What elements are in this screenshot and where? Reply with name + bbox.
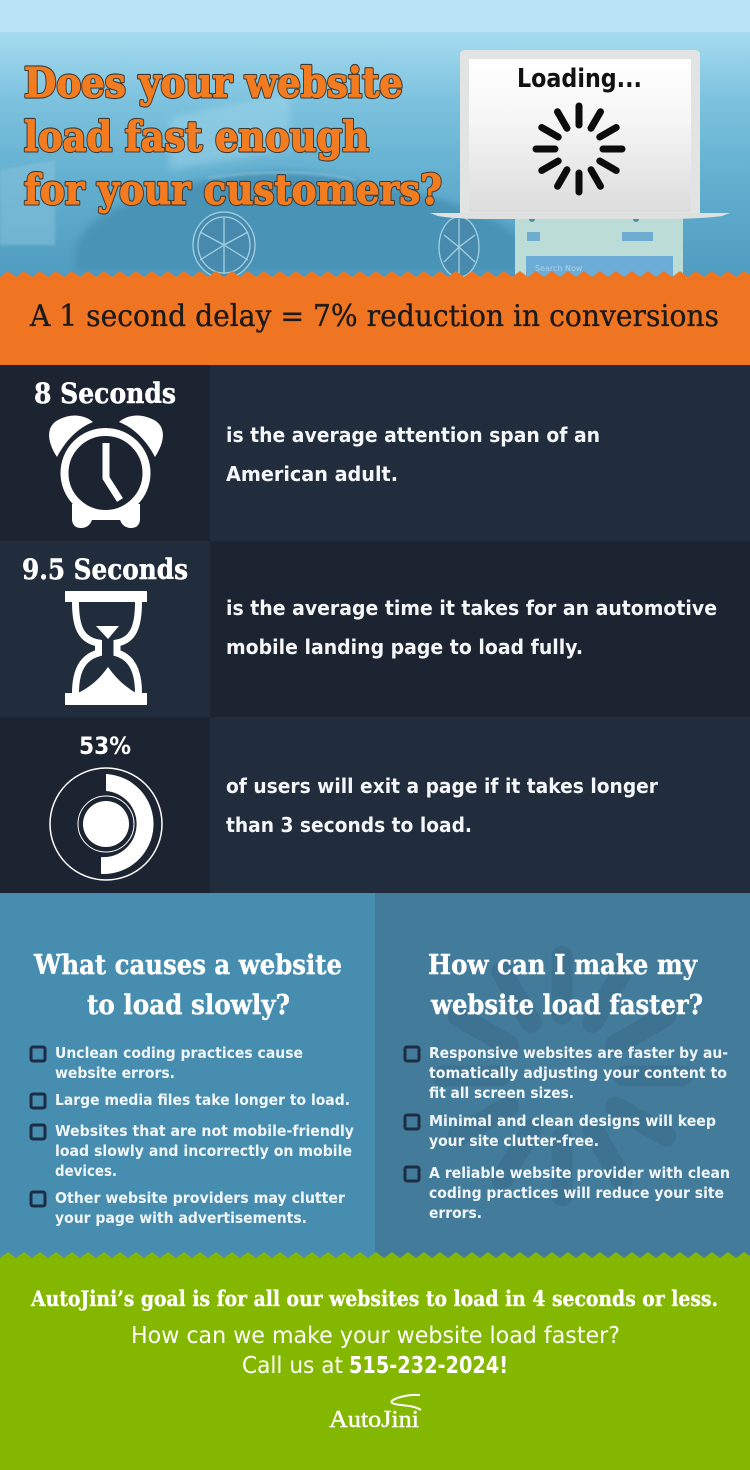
title: for your customers? [24, 166, 442, 214]
call to action: How can we make your website load faster? [131, 1323, 620, 1349]
panel: causes [0, 893, 375, 1259]
heading [428, 950, 703, 1021]
list: load slowly and incorrectly on mobile [55, 1142, 352, 1160]
web page behind laptop [515, 216, 683, 278]
stat description [226, 774, 658, 837]
list: website errors. [55, 1064, 175, 1082]
stat description: of users will exit a page if it takes longer [226, 774, 658, 798]
stat heading: 53% [79, 732, 131, 760]
list: errors. [429, 1204, 482, 1222]
banner text: A 1 second delay = 7% reduction in conversions [29, 299, 719, 334]
heading: to load slowly? [87, 990, 290, 1021]
icon: alarm clock [49, 415, 163, 528]
heading: What causes a website [33, 950, 342, 981]
list [429, 1044, 730, 1222]
title: Does your website [24, 59, 403, 107]
icon: faint spinner watermark [442, 956, 682, 1196]
stat heading: 8 Seconds [34, 377, 176, 410]
list: fit all screen sizes. [429, 1084, 574, 1102]
checkboxes [31, 1047, 45, 1206]
green footer [0, 1252, 750, 1470]
title: load fast enough [24, 113, 369, 161]
logo: AutoJini: AutoJini [329, 1407, 419, 1433]
title: for your customers? [24, 166, 442, 214]
stat description [226, 596, 717, 659]
call to action: 515-232-2024! [349, 1353, 508, 1379]
call to action: Call us at [242, 1353, 343, 1379]
web page behind laptop: Search Now [535, 264, 583, 273]
stat row: 8 seconds [0, 365, 750, 541]
list: Minimal and clean designs will keep [429, 1112, 716, 1130]
stat description: is the average attention span of an [226, 423, 600, 447]
orange banner [0, 271, 750, 365]
list [55, 1044, 354, 1227]
stat description: is the average time it takes for an automotive [226, 596, 717, 620]
car wheels [193, 212, 479, 278]
call to action [131, 1323, 620, 1379]
list: your page with advertisements. [55, 1209, 307, 1227]
list: Unclean coding practices cause [55, 1044, 303, 1062]
header background [0, 0, 750, 278]
list: coding practices will reduce your site [429, 1184, 724, 1202]
stat description: American adult. [226, 462, 398, 486]
laptop with loading spinner [430, 50, 730, 219]
title: load fast enough [24, 113, 369, 161]
panel: solutions [375, 893, 750, 1259]
stat description [226, 423, 600, 486]
stat heading: 9.5 Seconds [22, 553, 188, 586]
list: Large media files take longer to load. [55, 1091, 350, 1109]
stat row: 53% [0, 717, 750, 893]
logo: AutoJini [329, 1395, 421, 1433]
list: Other website providers may clutter [55, 1189, 346, 1207]
list: A reliable website provider with clean [429, 1164, 730, 1182]
stat row: 9.5 seconds [0, 541, 750, 717]
list: Responsive websites are faster by au- [429, 1044, 728, 1062]
title: Does your website [24, 59, 403, 107]
checkboxes [405, 1047, 419, 1181]
heading: How can I make my [428, 950, 698, 981]
loading text: Loading... [517, 64, 642, 94]
stat description: than 3 seconds to load. [226, 813, 472, 837]
icon: spinner [536, 106, 622, 192]
car photo background [0, 92, 530, 278]
icon: hourglass [65, 591, 147, 705]
list: devices. [55, 1162, 117, 1180]
heading [33, 950, 342, 1021]
list: your site clutter-free. [429, 1132, 599, 1150]
icon: donut chart [50, 768, 162, 880]
list: Websites that are not mobile-friendly [55, 1122, 354, 1140]
list: tomatically adjusting your content to [429, 1064, 727, 1082]
heading: website load faster? [430, 990, 703, 1021]
stat description: mobile landing page to load fully. [226, 635, 583, 659]
title [24, 59, 442, 214]
